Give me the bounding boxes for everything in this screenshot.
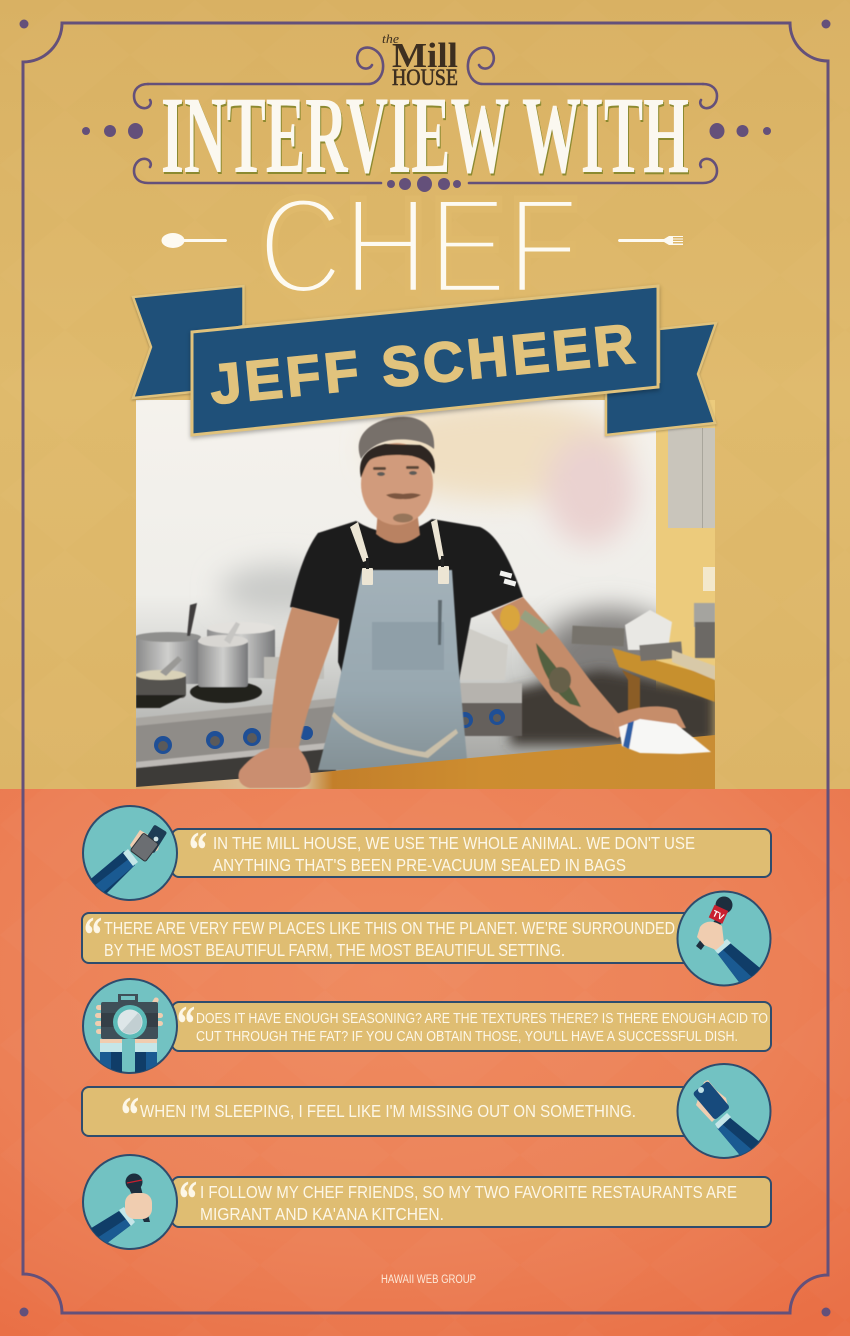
left hand <box>238 748 311 788</box>
yellow wall and cabinet <box>656 400 715 735</box>
wooden counter <box>136 735 715 789</box>
footer credit: HAWAII WEB GROUP <box>381 1274 476 1286</box>
background: orange lower panel <box>0 789 850 1336</box>
ribbon: left tail <box>133 286 244 398</box>
quote bar <box>172 1177 771 1227</box>
quote text: ANYTHING THAT'S BEEN PRE-VACUUM SEALED IN BAGS <box>213 855 626 875</box>
quote bar <box>82 913 692 963</box>
quote text: THERE ARE VERY FEW PLACES LIKE THIS ON THE PLANET. WE'RE SURROUNDED <box>104 918 675 938</box>
baseball cap <box>359 417 434 459</box>
logo: the Mill House: the <box>382 31 399 46</box>
pots and pans <box>135 603 508 708</box>
striped apron <box>318 570 468 770</box>
quote 3 <box>83 979 771 1076</box>
background: gold upper panel <box>0 0 850 790</box>
left arm <box>269 607 339 752</box>
sleeve logo <box>499 571 516 586</box>
quote text <box>196 1011 768 1045</box>
name: Jeff Scheer: JEFF SCHEER <box>207 312 637 416</box>
icon: fork <box>618 236 683 245</box>
quote bar <box>172 829 771 877</box>
ribbon: right tail <box>606 323 716 435</box>
kitchen wall <box>136 400 680 789</box>
heading: Chef: CHEF <box>258 170 579 323</box>
quote text <box>104 918 675 960</box>
quote text <box>213 833 695 875</box>
quote 2 <box>82 892 772 990</box>
quote text: WHEN I'M SLEEPING, I FEEL LIKE I'M MISSING OUT ON SOMETHING. <box>140 1101 636 1121</box>
quote 5 <box>80 1155 771 1250</box>
right arm with tattoos <box>491 597 622 738</box>
icon: spoon <box>162 233 227 248</box>
quote text: CUT THROUGH THE FAT? IF YOU CAN OBTAIN THOSE, YOU'LL HAVE A SUCCESSFUL DISH. <box>196 1029 738 1045</box>
quote 4 <box>82 1064 772 1160</box>
photo: chef in the kitchen <box>135 400 716 789</box>
logo: the Mill House: Mill <box>392 36 458 75</box>
icon: hands holding camera <box>83 979 177 1076</box>
title ornament frame <box>134 48 717 183</box>
icon: hand holding TV microphone: TV <box>711 908 726 922</box>
icon: hand holding phone <box>80 806 177 900</box>
quote text: MIGRANT AND KA'ANA KITCHEN. <box>200 1204 444 1224</box>
quote text: BY THE MOST BEAUTIFUL FARM, THE MOST BEAUTIFUL SETTING. <box>104 940 565 960</box>
quote text: IN THE MILL HOUSE, WE USE THE WHOLE ANIMAL. WE DON'T USE <box>213 833 695 853</box>
icon: hand holding smartphone <box>678 1064 772 1160</box>
quote text: I FOLLOW MY CHEF FRIENDS, SO MY TWO FAVORITE RESTAURANTS ARE <box>200 1182 737 1202</box>
stove range <box>136 683 522 789</box>
icon: hand holding TV microphone <box>678 892 772 990</box>
black t-shirt <box>290 519 523 680</box>
quotation mark: “ <box>84 906 102 962</box>
ornament dots <box>82 123 771 192</box>
quote bar <box>172 1002 771 1051</box>
right hand and towel <box>612 706 711 754</box>
icon: hand holding microphone <box>80 1155 177 1250</box>
ribbon: main band <box>192 286 658 435</box>
stove knobs <box>154 709 505 754</box>
head and face <box>360 443 435 543</box>
quotation mark: “ <box>179 1170 197 1226</box>
quotation mark: “ <box>177 995 195 1051</box>
right-hand prep table <box>572 603 715 720</box>
apron straps <box>350 519 449 585</box>
logo: the Mill House <box>382 31 458 90</box>
quotation mark: “ <box>121 1086 139 1142</box>
quotation mark: “ <box>189 821 207 877</box>
dark area behind counter <box>510 670 716 745</box>
quote 1 <box>80 806 771 900</box>
quote bar <box>82 1087 692 1136</box>
logo: the Mill House: HOUSE <box>392 65 458 90</box>
quote text <box>200 1182 737 1224</box>
